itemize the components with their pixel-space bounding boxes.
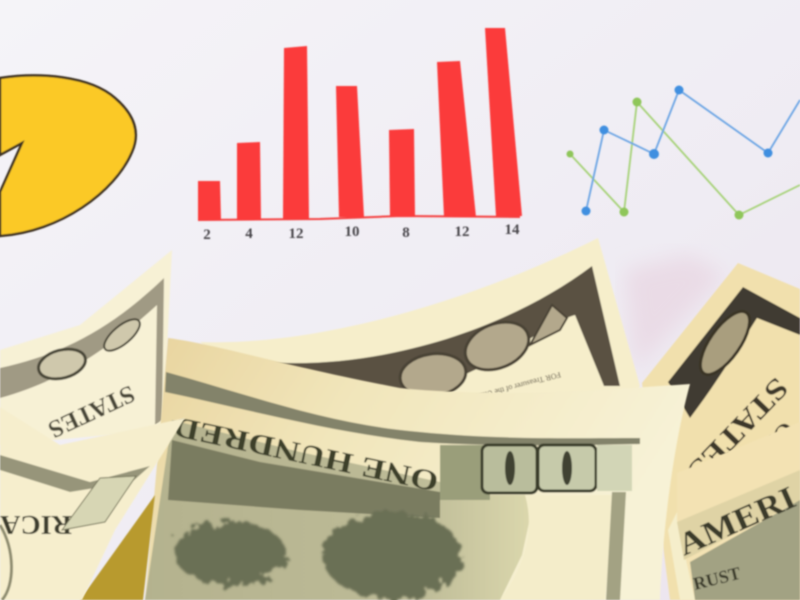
building and lawn engraving xyxy=(145,420,535,600)
shadow on paper xyxy=(625,255,725,370)
text: ONE HUNDRED: ONE HUNDRED xyxy=(171,410,441,497)
axis labels: 14 xyxy=(504,222,520,238)
bill: bottom right xyxy=(668,422,800,600)
bar chart xyxy=(198,28,522,243)
blue line xyxy=(586,90,800,211)
axis labels: 10 xyxy=(344,224,360,240)
bill: folded bottom-left xyxy=(0,407,185,600)
bill: center back xyxy=(200,238,640,420)
bill: folded bottom-left: RICA xyxy=(0,510,72,540)
bill: left top: STATES xyxy=(44,380,139,443)
pie chart xyxy=(0,75,136,236)
axis labels: 8 xyxy=(402,225,410,241)
bill: center back: FOR Treasurer of the United xyxy=(471,370,562,403)
bill: far right: STATES xyxy=(681,371,795,488)
axis labels: 12 xyxy=(288,226,304,242)
yellow gap under fold xyxy=(80,495,155,600)
engraved band xyxy=(165,372,640,445)
axis xyxy=(198,216,520,220)
bill: main front xyxy=(145,338,690,600)
trees xyxy=(174,521,286,585)
line chart xyxy=(566,86,800,220)
bill: left top xyxy=(0,250,172,445)
axis labels xyxy=(203,222,520,243)
axis labels: 12 xyxy=(454,224,470,240)
axis labels: 2 xyxy=(203,227,211,243)
bill: bottom right: RUST xyxy=(691,563,743,594)
bill: bottom right: AMERI xyxy=(672,479,800,562)
bill: far right xyxy=(642,263,800,600)
bars xyxy=(198,28,522,220)
green line xyxy=(570,102,800,215)
numeral 100 xyxy=(482,445,632,493)
axis labels: 4 xyxy=(245,226,253,242)
